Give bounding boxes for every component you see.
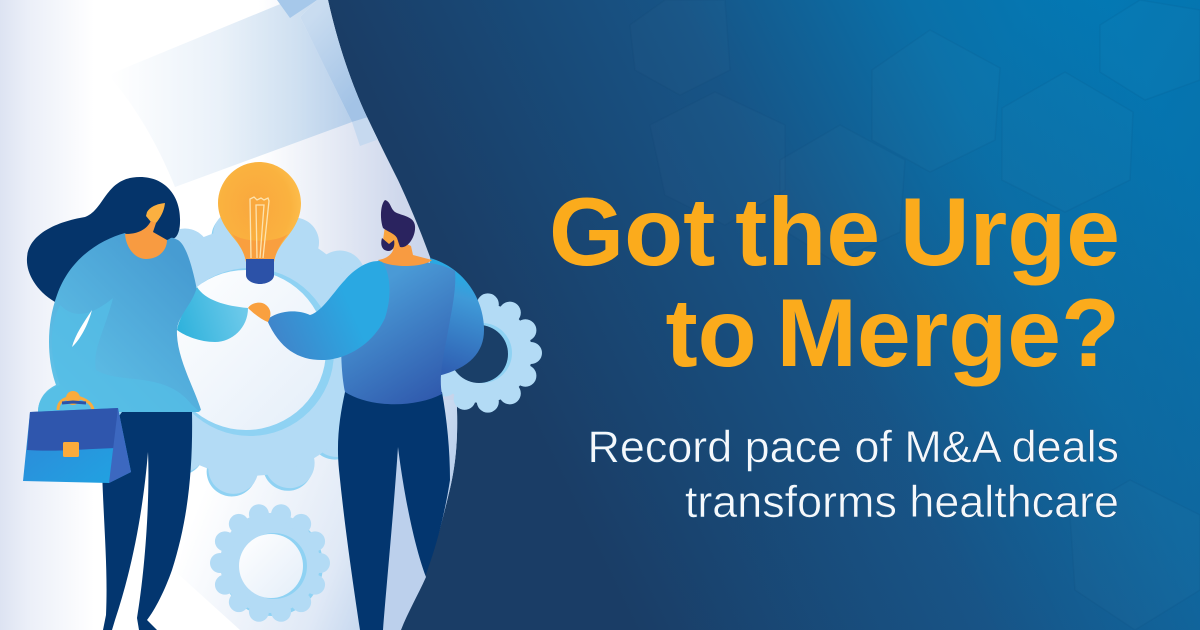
legs bbox=[102, 408, 192, 630]
hand bbox=[248, 303, 270, 322]
face bbox=[146, 203, 165, 223]
sleeve inner highlight bbox=[38, 298, 200, 412]
handle bbox=[58, 397, 93, 410]
icon: light bulb bbox=[218, 162, 301, 284]
title: to Merge? bbox=[665, 280, 1120, 387]
arm bbox=[177, 287, 248, 342]
panel: pale left background bbox=[0, 0, 470, 630]
paper sheet upper bbox=[151, 0, 352, 187]
case flap bbox=[27, 408, 118, 451]
leg gap bbox=[383, 447, 426, 630]
paper small square middle bbox=[352, 117, 378, 146]
beard bbox=[381, 238, 394, 251]
face bbox=[382, 224, 398, 251]
torso bbox=[341, 259, 455, 404]
gap under arm bbox=[72, 310, 92, 347]
figure: woman bbox=[27, 177, 248, 630]
subtitle bbox=[588, 421, 1119, 527]
subtitle: Record pace of M&A deals bbox=[588, 421, 1119, 472]
paper band upper bbox=[300, 0, 370, 122]
hair bbox=[27, 177, 180, 302]
neck bbox=[125, 221, 167, 259]
paper sheet lower bbox=[203, 406, 458, 630]
paper small square top bbox=[277, 0, 317, 18]
icon: small gear bbox=[220, 513, 323, 616]
legs bbox=[338, 392, 450, 630]
figure: man bbox=[248, 200, 484, 630]
neck bbox=[378, 238, 432, 266]
title: Got the Urge bbox=[549, 179, 1120, 286]
clasp bbox=[63, 442, 79, 457]
icon: large gear bbox=[104, 207, 395, 499]
hair bbox=[381, 200, 415, 247]
icon: right gear bbox=[432, 303, 532, 403]
case front bbox=[23, 408, 131, 483]
figure: briefcase bbox=[23, 391, 131, 483]
subtitle: transforms healthcare bbox=[685, 476, 1119, 527]
title bbox=[549, 179, 1120, 387]
back bbox=[430, 258, 484, 376]
body bbox=[38, 233, 201, 412]
arm bbox=[267, 261, 390, 360]
case side bbox=[109, 408, 131, 483]
